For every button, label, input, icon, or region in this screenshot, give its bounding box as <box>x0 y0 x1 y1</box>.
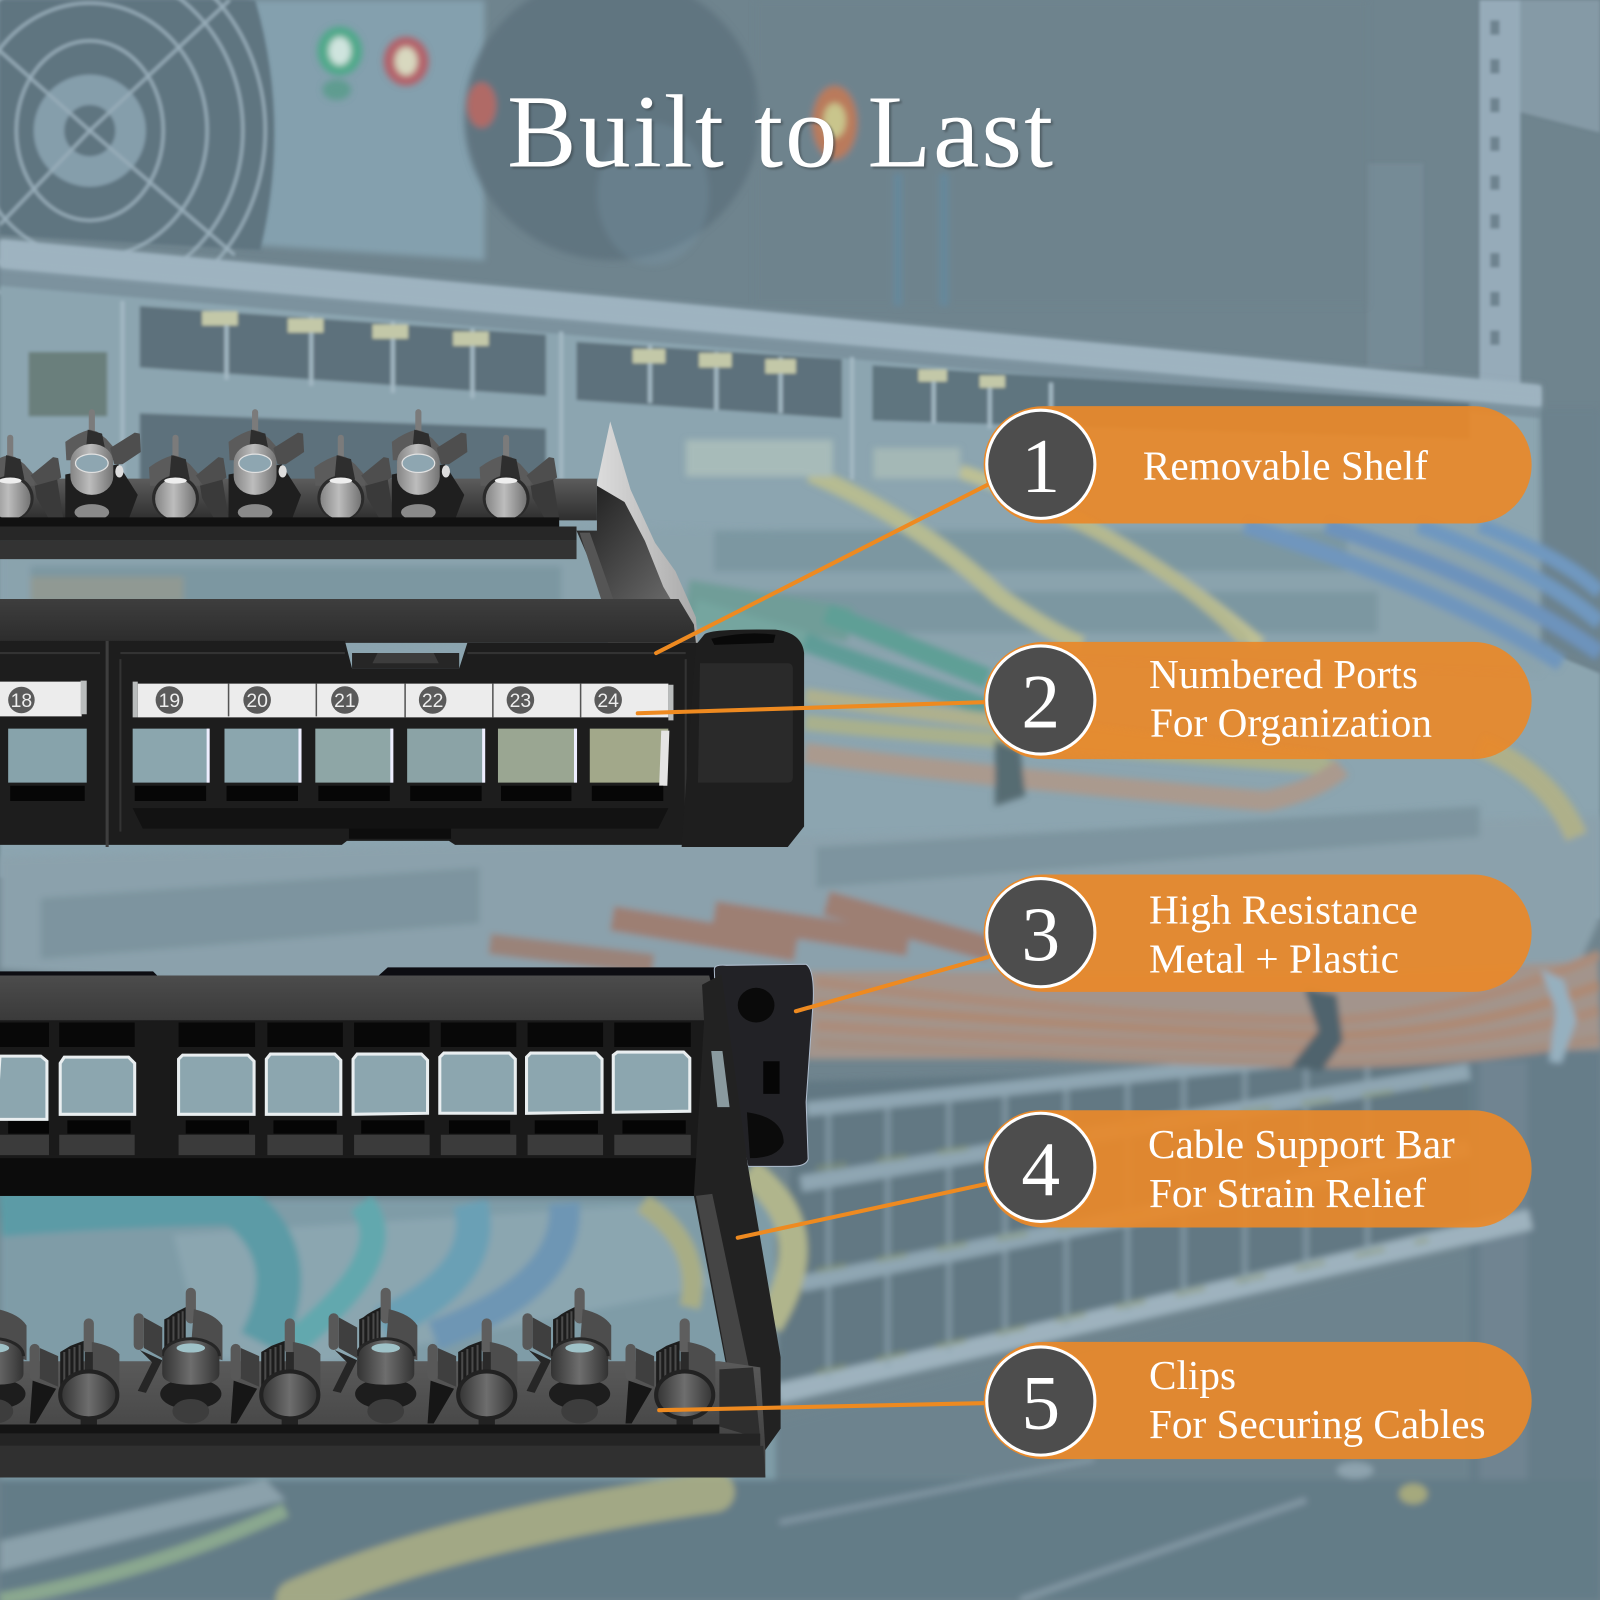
product: lower patch panel rear view <box>0 964 813 1478</box>
port windows <box>8 729 669 801</box>
cable support arm <box>694 974 781 1450</box>
callout 4: cable support bar: Cable Support Bar <box>1148 1121 1455 1167</box>
callout 3: high resistance <box>984 874 1532 992</box>
grey top plate <box>0 976 720 1020</box>
lower right switch with port cells <box>776 1061 1469 1393</box>
port body <box>0 1020 704 1196</box>
bottom yellow cable <box>296 1492 714 1600</box>
callout 1: removable shelf: Removable Shelf <box>1143 443 1428 489</box>
label strip: 19 <box>159 690 180 712</box>
callout 5: clips: 5 <box>1021 1360 1060 1446</box>
lower left teal and blue cable loops <box>0 1203 279 1343</box>
callout 2: numbered ports <box>984 642 1532 759</box>
title: Built to Last <box>507 73 1053 189</box>
end block <box>714 964 813 1166</box>
lower body of the background switch <box>0 240 1600 918</box>
callout 3: high resistance: High Resistance <box>1149 886 1418 932</box>
callout 1: removable shelf: 1 <box>1021 423 1060 509</box>
leader line 5 <box>659 1403 988 1410</box>
lower left backdrop <box>0 1199 776 1480</box>
leader line 2 <box>638 702 988 713</box>
callout 5: clips <box>984 1342 1532 1459</box>
callout 2: numbered ports: For Organization <box>1150 700 1432 746</box>
silver shelf arm <box>597 421 698 645</box>
label strip: 18 <box>11 690 32 712</box>
label strip: 20 <box>246 690 268 712</box>
mixed cable bundle <box>805 696 1327 760</box>
white edged port windows <box>0 1052 690 1119</box>
orange connectors <box>490 944 653 964</box>
callout 4: cable support bar: 4 <box>1021 1126 1060 1212</box>
product: upper patch panel front view <box>0 409 804 847</box>
front fascia <box>0 641 698 845</box>
label strip <box>0 681 673 720</box>
callout 2: numbered ports: 2 <box>1021 659 1060 745</box>
callout 3: high resistance: Metal + Plastic <box>1149 935 1399 981</box>
callout 5: clips: Clips <box>1149 1352 1236 1398</box>
callout 1: removable shelf <box>984 406 1532 523</box>
label strip: 22 <box>422 690 443 712</box>
cable ties <box>995 740 1026 806</box>
label strip: 23 <box>510 690 531 712</box>
LED lights <box>317 27 362 76</box>
upper shelf with clips <box>0 409 597 559</box>
callout 2: numbered ports: Numbered Ports <box>1149 651 1418 697</box>
yellow cables top right <box>810 473 1082 645</box>
top plate <box>0 599 696 643</box>
callout 4: cable support bar <box>984 1110 1532 1228</box>
leader line 1 <box>656 485 988 653</box>
callout 5: clips: For Securing Cables <box>1149 1401 1486 1447</box>
teal cables <box>827 613 988 679</box>
label strip: 24 <box>597 690 619 712</box>
callout 3: high resistance: 3 <box>1021 891 1060 977</box>
callout 4: cable support bar: For Strain Relief <box>1149 1170 1426 1216</box>
leader line 4 <box>738 1184 988 1238</box>
strain reliefs <box>686 440 833 476</box>
lower shelf <box>0 1361 765 1478</box>
end block <box>682 629 804 847</box>
lower clips <box>0 1288 715 1426</box>
blue cables <box>1245 526 1561 663</box>
port rows mid <box>0 510 1541 673</box>
orange cable bundle <box>806 1005 1600 1015</box>
leader line 3 <box>796 957 988 1011</box>
label strip: 21 <box>334 690 356 712</box>
rear top edge <box>0 967 719 1026</box>
